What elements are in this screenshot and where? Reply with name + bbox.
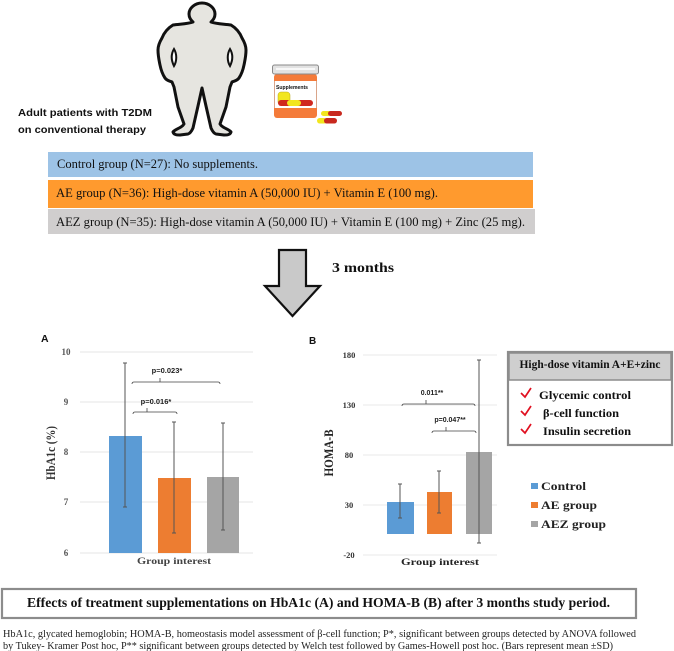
label: panel A: A <box>41 333 49 345</box>
panel: AE group row <box>48 180 533 208</box>
significance brackets A <box>132 366 220 414</box>
label: 3 months: 3 months <box>332 261 395 276</box>
significance brackets B: p=0.047** <box>434 417 466 424</box>
axis ticks A: 6 <box>64 548 69 558</box>
label: panel B: B <box>309 336 316 347</box>
significance brackets A: p=0.023* <box>152 366 182 375</box>
error bars B <box>398 360 481 543</box>
axis ticks B: 30 <box>345 500 353 510</box>
axis ticks A: 8 <box>64 447 69 457</box>
x axis title A: Group interest <box>137 556 211 566</box>
axis ticks B: -20 <box>343 550 355 560</box>
panel: AEZ group row <box>48 209 535 234</box>
axis title: HOMA-B: HOMA-B <box>322 430 336 476</box>
box header <box>509 353 671 380</box>
checklist: glycemic control: Glycemic control <box>539 390 631 402</box>
chart A: HbA1c bar chart <box>41 333 253 566</box>
error bars A <box>123 363 225 533</box>
conclusion box <box>2 589 636 618</box>
axis ticks B: 80 <box>345 450 353 460</box>
panel: outcomes box: High-dose vitamin A+E+zinc <box>520 359 660 371</box>
conclusion box: Effects of treatment supplementations on HbA1c (A) and HOMA-B (B) after 3 months study period. <box>27 595 610 610</box>
icon: obese person silhouette <box>158 3 246 135</box>
axis ticks B: 130 <box>343 400 355 410</box>
axis ticks A <box>62 347 71 558</box>
significance brackets A: p=0.016* <box>141 397 171 406</box>
icon: supplements bottle with capsules <box>272 65 342 124</box>
x axis title B: Group interest <box>401 557 479 567</box>
legend: AE group <box>541 500 597 512</box>
axis ticks A: 9 <box>64 397 69 407</box>
axis ticks A: 10 <box>62 347 71 357</box>
text: patient description <box>18 107 152 136</box>
checklist: beta-cell function <box>521 406 620 420</box>
legend: Control <box>541 481 586 493</box>
checklist: glycemic control <box>521 388 631 402</box>
footnote: HbA1c, glycated hemoglobin; HOMA-B, homeostasis model assessment of β-cell function; P*, significant between groups detected by ANOVA followed <box>3 629 636 640</box>
checklist: insulin secretion: Insulin secretion <box>543 426 632 438</box>
axis ticks A: 7 <box>64 497 69 507</box>
text: patient description: Adult patients with T2DM <box>18 107 152 119</box>
text: patient description: on conventional therapy <box>18 124 146 136</box>
significance brackets B <box>402 390 476 433</box>
bars B <box>387 452 492 534</box>
axis ticks B <box>343 350 355 560</box>
checklist: insulin secretion <box>521 424 632 438</box>
panel: control group row: Control group (N=27): No supplements. <box>57 157 258 171</box>
legend <box>531 481 606 531</box>
chart B: HOMA-B bar chart <box>309 336 497 567</box>
axis title: HbA1c: HbA1c (%) <box>44 426 58 480</box>
footnote <box>3 629 636 651</box>
panel: outcomes box <box>508 352 672 445</box>
panel: control group row <box>48 152 533 177</box>
axis ticks B: 180 <box>343 350 355 360</box>
arrow: down arrow <box>265 250 320 316</box>
legend: AEZ group <box>541 519 606 531</box>
panel: AEZ group row: AEZ group (N=35): High-dose vitamin A (50,000 IU) + Vitamin E (100 mg) + Zinc (25 mg). <box>56 215 525 229</box>
bars A <box>109 436 239 553</box>
panel: AE group row: AE group (N=36): High-dose vitamin A (50,000 IU) + Vitamin E (100 mg). <box>56 186 438 200</box>
significance brackets B: 0.011** <box>421 390 444 397</box>
icon: supplements bottle with capsules: Supplements <box>276 85 308 91</box>
checklist: beta-cell function: β-cell function <box>543 408 620 420</box>
